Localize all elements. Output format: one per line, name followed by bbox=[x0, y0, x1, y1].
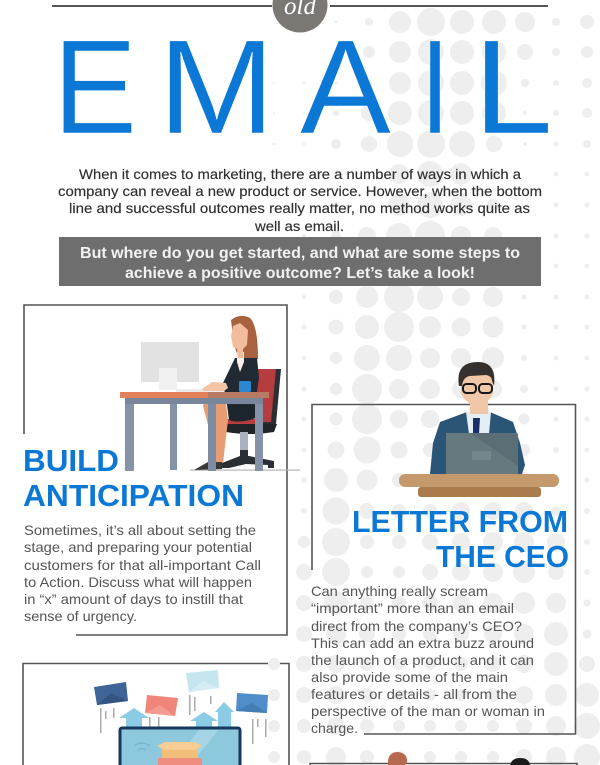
icon: CEO at desk bbox=[399, 362, 559, 497]
intro paragraph: When it comes to marketing, there are a number of ways in which a bbox=[79, 166, 521, 182]
heading: letter from the CEO: THE CEO bbox=[436, 539, 569, 574]
intro paragraph: line and successful outcomes really matter, no method works quite as bbox=[69, 200, 530, 216]
panel: letter from the CEO bbox=[311, 362, 576, 736]
icon: woman at desk bbox=[120, 316, 300, 471]
text: build anticipation body bbox=[24, 522, 261, 624]
icon: two people heads bbox=[388, 752, 530, 765]
title: EMAIL: A bbox=[300, 13, 392, 162]
text: letter from the CEO body: charge. bbox=[311, 720, 358, 736]
text: build anticipation body: stage, and preparing your potential bbox=[24, 539, 252, 555]
intro paragraph: company can reveal a new product or service. However, when the bottom bbox=[58, 183, 542, 199]
panel: sending emails bbox=[23, 658, 289, 765]
panel: people bbox=[310, 752, 577, 765]
title: EMAIL: L bbox=[473, 13, 553, 162]
heading: build anticipation bbox=[23, 443, 244, 513]
title: EMAIL: I bbox=[420, 13, 450, 162]
text: build anticipation body: to Action. Discuss what will happen bbox=[24, 574, 252, 590]
text: letter from the CEO body: perspective of the man or woman in bbox=[311, 703, 545, 719]
heading: build anticipation: ANTICIPATION bbox=[23, 478, 244, 513]
text: letter from the CEO body bbox=[311, 583, 545, 736]
text: build anticipation body: Sometimes, it’s all about setting the bbox=[24, 522, 256, 538]
heading: letter from the CEO: LETTER FROM bbox=[352, 504, 568, 539]
callout band bbox=[59, 237, 541, 286]
text: letter from the CEO body: features or details - all from the bbox=[311, 686, 517, 702]
title: EMAIL: E bbox=[53, 13, 137, 162]
callout band: But where do you get started, and what are some steps to bbox=[80, 245, 520, 262]
text: letter from the CEO body: the launch of a product, and it can bbox=[311, 652, 534, 668]
header rule with badge bbox=[52, 0, 548, 32]
background halftone dot pattern bbox=[272, 8, 600, 765]
callout band: achieve a positive outcome? Let’s take a look! bbox=[125, 265, 475, 282]
panel: build anticipation bbox=[23, 305, 300, 635]
icon: laptop with flying envelopes bbox=[94, 670, 268, 765]
text: build anticipation body: sense of urgency. bbox=[24, 608, 137, 624]
heading: build anticipation: BUILD bbox=[23, 443, 119, 478]
text: letter from the CEO body: This can add an extra buzz around bbox=[311, 635, 534, 651]
text: letter from the CEO body: also provide some of the main bbox=[311, 669, 508, 685]
text: build anticipation body: in “x” amount of days to instill that bbox=[24, 591, 243, 607]
text: letter from the CEO body: “important” more than an email bbox=[311, 600, 514, 616]
text: build anticipation body: customers for that all-important Call bbox=[24, 557, 261, 573]
intro paragraph: well as email. bbox=[254, 218, 344, 234]
text: letter from the CEO body: Can anything really scream bbox=[311, 583, 488, 599]
title: EMAIL bbox=[53, 13, 553, 162]
title: EMAIL: M bbox=[158, 13, 275, 162]
heading: letter from the CEO bbox=[352, 504, 569, 574]
text: letter from the CEO body: direct from the company’s CEO? bbox=[311, 618, 522, 634]
intro paragraph bbox=[58, 166, 542, 234]
